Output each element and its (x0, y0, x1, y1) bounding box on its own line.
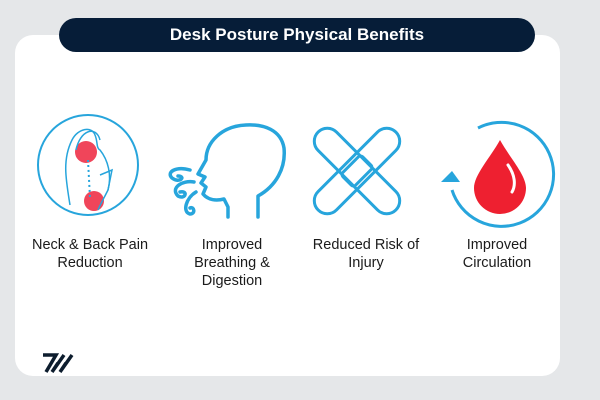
label: breathing (194, 237, 270, 289)
label: circulation: Circulation (463, 255, 531, 271)
icon: circulation (441, 122, 554, 226)
label: breathing: Breathing & (194, 255, 270, 271)
label: injury (313, 237, 420, 271)
label: neck back: Reduction (57, 255, 123, 271)
logo (43, 355, 72, 372)
label: injury: Reduced Risk of (313, 237, 419, 253)
icon: back pain (38, 115, 138, 215)
label: breathing: Digestion (202, 273, 262, 289)
label: injury: Injury (348, 255, 384, 271)
title (59, 18, 535, 52)
label: circulation: Improved (467, 237, 527, 253)
label: neck back (32, 237, 148, 271)
panel: card (15, 35, 560, 376)
icon: bandage (309, 123, 405, 219)
label: circulation (463, 237, 531, 271)
label: neck back: Neck & Back Pain (32, 237, 148, 253)
icon: head breathing (170, 125, 284, 217)
label: breathing: Improved (202, 237, 262, 253)
title: Desk Posture Physical Benefits (170, 25, 424, 44)
